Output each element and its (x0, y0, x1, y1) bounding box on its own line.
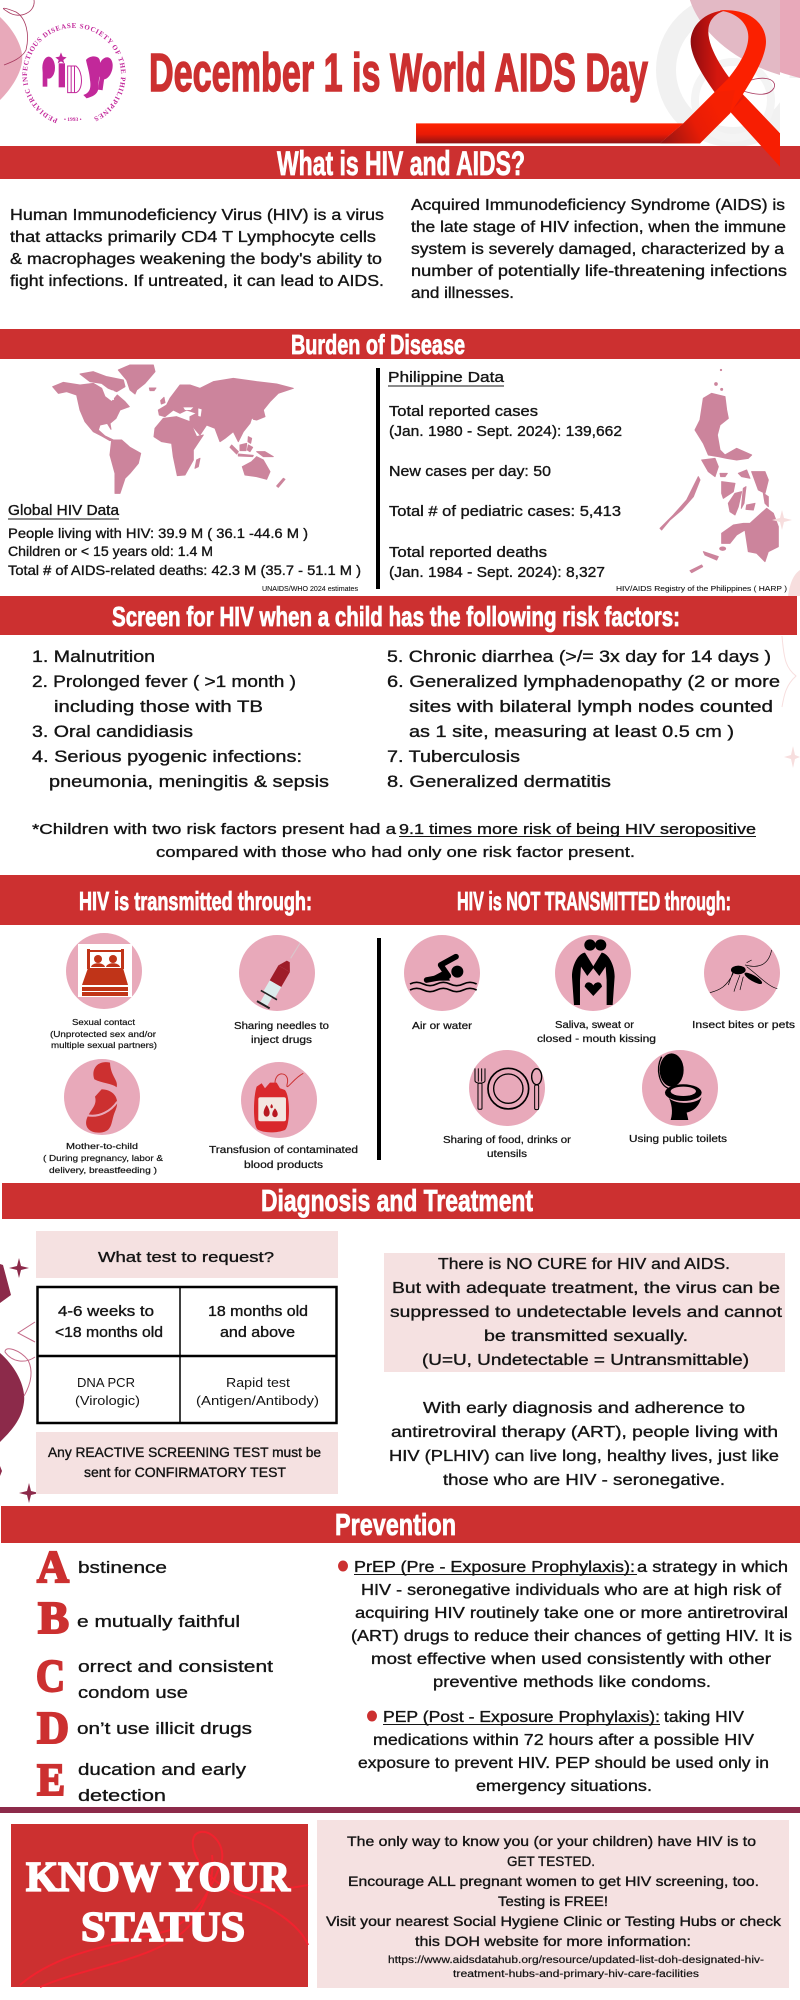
table: HIV tests by age: and above (220, 1325, 295, 1341)
banner: risk factors (0, 596, 797, 635)
panel: get tested information: https://www.aidsdatahub.org/resource/updated-list-doh-designated-hiv- (388, 1955, 764, 1966)
text block: PrEP (338, 1559, 792, 1691)
list: ABCDE of prevention: bstinence (78, 1558, 167, 1577)
list: risk factors 1 to 4: 3. Oral candidiasis (32, 723, 193, 741)
decorative sparkles and curves: right edge (772, 510, 800, 768)
banner: Burden of Disease: Burden of Disease (291, 329, 465, 360)
text block: PrEP: preventive methods like condoms. (433, 1674, 711, 1691)
text block: HIV definition: that attacks primarily CD4 T Lymphocyte cells (10, 229, 376, 246)
label: public toilets: Using public toilets (629, 1134, 727, 1145)
panel: get tested information: Visit your nearest Social Hygiene Clinic or Testing Hubs or check (326, 1913, 782, 1929)
icon: toilet (642, 1050, 718, 1126)
panel: global HIV data (8, 503, 361, 593)
list: ABCDE of prevention: detection (78, 1786, 166, 1805)
callout: no cure: be transmitted sexually. (484, 1328, 688, 1345)
callout: no cure: But with adequate treatment, the virus can be (392, 1280, 780, 1297)
text block: AIDS definition: Acquired Immunodeficiency Syndrome (AIDS) is (411, 197, 785, 214)
panel: get tested information: The only way to know you (or your children) have HIV is to (347, 1833, 756, 1849)
panel: get tested information: GET TESTED. (507, 1853, 595, 1869)
panel: know your status (11, 1824, 308, 1987)
label: sexual contact: Sexual contact (72, 1017, 136, 1027)
label: saliva: closed - mouth kissing (537, 1034, 656, 1045)
panel: what test to request (36, 1231, 338, 1278)
panel: get tested information: treatment-hubs-and-primary-hiv-care-facilities (453, 1969, 699, 1980)
label: mother to child (43, 1141, 163, 1175)
banner: Burden of Disease (0, 329, 800, 360)
list: risk factors 5 to 8: 7. Tuberculosis (387, 748, 520, 766)
panel: Philippine data: New cases per day: 50 (389, 463, 551, 480)
panel: know your status: KNOW YOUR (26, 1855, 291, 1901)
panel: Philippine data: Philippine Data (388, 369, 505, 386)
list: ABCDE of prevention: ducation and early (78, 1760, 247, 1779)
list: ABCDE of prevention: condom use (78, 1683, 188, 1702)
panel: Philippine data (388, 369, 788, 593)
label: sharing needles: Sharing needles to (234, 1021, 329, 1032)
icon: red ribbon (416, 10, 780, 167)
table: HIV tests by age (37, 1287, 337, 1423)
label: insect bites: Insect bites or pets (692, 1020, 795, 1031)
divider: transmission section (377, 938, 381, 1160)
list: ABCDE of prevention: e mutually faithful (77, 1612, 240, 1631)
icon: blood bag (241, 1062, 317, 1138)
panel: get tested information: Encourage ALL pregnant women to get HIV screening, too. (348, 1873, 759, 1889)
label: sexual contact: (Unprotected sex and/or (50, 1029, 156, 1039)
text block: HIV definition: & macrophages weakening the body's ability to (10, 251, 382, 268)
text block: early diagnosis (389, 1400, 779, 1489)
icon: syringe (239, 935, 315, 1011)
label: mother to child: ( During pregnancy, labor & (43, 1153, 163, 1163)
banner: transmission: HIV is transmitted through: (79, 886, 312, 916)
text block: PEP: taking HIV (664, 1709, 745, 1726)
banner: Prevention (1, 1506, 800, 1543)
list: risk factors 1 to 4 (32, 648, 329, 791)
text block: PEP: PEP (Post - Exposure Prophylaxis): (383, 1709, 660, 1726)
text block: early diagnosis: those who are HIV - seronegative. (443, 1472, 725, 1489)
text block: PEP: exposure to prevent HIV. PEP should be used only in (358, 1755, 769, 1772)
icon: couple (555, 935, 631, 1011)
banner: Diagnosis and Treatment: Diagnosis and Treatment (261, 1183, 533, 1218)
panel: what test to request: What test to request? (98, 1249, 274, 1266)
list: ABCDE of prevention: on’t use illicit drugs (77, 1719, 252, 1738)
panel: global HIV data: Global HIV Data (8, 503, 120, 519)
label: transfusion: Transfusion of contaminated (209, 1145, 358, 1156)
callout: confirmatory test (36, 1432, 338, 1494)
callout: no cure: suppressed to undetectable levels and cannot (390, 1304, 783, 1321)
panel: Philippine data: Total reported deaths (389, 544, 547, 561)
table: HIV tests by age: <18 months old (55, 1325, 163, 1341)
callout: no cure: (U=U, Undetectable = Untransmittable) (422, 1352, 749, 1369)
panel: get tested information: this DOH website for more information: (415, 1933, 691, 1949)
table: HIV tests by age: (Antigen/Antibody) (196, 1393, 319, 1408)
world map (53, 365, 293, 493)
label: sharing food (443, 1135, 572, 1160)
icon: plate and cutlery (469, 1050, 545, 1126)
text block: PEP: medications within 72 hours after a possible HIV (373, 1732, 755, 1749)
callout: no cure (384, 1253, 785, 1372)
icon: sexual contact (66, 933, 142, 1009)
callout: no cure: There is NO CURE for HIV and AIDS. (438, 1256, 730, 1273)
label: air or water: Air or water (412, 1021, 473, 1032)
list: ABCDE of prevention: orrect and consistent (78, 1657, 273, 1676)
panel: Philippine data: HIV/AIDS Registry of the Philippines ( HARP ) (616, 584, 788, 593)
callout: risk note: 9.1 times more risk of being HIV seropositive (399, 821, 756, 838)
label: sharing needles (234, 1021, 329, 1046)
list: risk factors 5 to 8: as 1 site, measuring at least 0.5 cm ) (409, 723, 734, 741)
text block: AIDS definition: number of potentially life-threatening infections (411, 263, 787, 280)
panel: Philippine data: Total reported cases (389, 403, 538, 420)
list: risk factors 1 to 4: 1. Malnutrition (32, 648, 155, 666)
banner: Prevention: Prevention (335, 1507, 456, 1542)
callout: confirmatory test: Any REACTIVE SCREENING TEST must be (48, 1445, 321, 1460)
list: risk factors 5 to 8: 8. Generalized dermatitis (387, 773, 611, 791)
text block: PEP: emergency situations. (476, 1778, 652, 1795)
banner: transmission (0, 875, 800, 925)
label: sexual contact: multiple sexual partners) (51, 1040, 157, 1050)
table: HIV tests by age: 4-6 weeks to (58, 1304, 154, 1320)
panel: know your status: STATUS (81, 1905, 245, 1951)
label: sexual contact (50, 1017, 157, 1050)
callout: risk note (32, 821, 756, 861)
list: ABCDE of prevention: B (38, 1592, 69, 1643)
text block: AIDS definition: the late stage of HIV infection, when the immune (411, 219, 786, 236)
list: risk factors 1 to 4: 4. Serious pyogenic infections: (32, 748, 302, 766)
text block: AIDS definition (411, 197, 787, 302)
list: risk factors 5 to 8 (387, 648, 780, 791)
table: HIV tests by age: (Virologic) (75, 1393, 140, 1408)
label: saliva: Saliva, sweat or (555, 1020, 635, 1031)
text block: HIV definition (10, 207, 384, 290)
list: ABCDE of prevention: C (36, 1650, 65, 1701)
table: HIV tests by age: DNA PCR (77, 1375, 135, 1390)
label: mother to child: Mother-to-child (66, 1141, 138, 1151)
text block: AIDS definition: and illnesses. (411, 285, 514, 302)
list: risk factors 1 to 4: 2. Prolonged fever ( >1 month ) (32, 673, 296, 691)
panel: Philippine data: (Jan. 1980 - Sept. 2024): 139,662 (389, 423, 622, 440)
panel: get tested information: Testing is FREE! (498, 1893, 608, 1909)
table: HIV tests by age: Rapid test (226, 1375, 290, 1390)
text block: HIV definition: Human Immunodeficiency Virus (HIV) is a virus (10, 207, 384, 224)
callout: risk note: compared with those who had only one risk factor present. (156, 844, 635, 861)
label: mother to child: delivery, breastfeeding ) (49, 1165, 157, 1175)
panel: global HIV data: UNAIDS/WHO 2024 estimates (262, 584, 358, 593)
divider: maroon bar (0, 1807, 800, 1813)
callout: confirmatory test: sent for CONFIRMATORY TEST (84, 1465, 286, 1480)
text block: PrEP: HIV - seronegative individuals who are at high risk of (361, 1582, 782, 1599)
list: risk factors 5 to 8: 5. Chronic diarrhea (>/= 3x day for 14 days ) (387, 648, 771, 666)
text block: early diagnosis: With early diagnosis and adherence to (423, 1400, 745, 1417)
list: ABCDE of prevention: D (37, 1702, 69, 1753)
icon: mosquito (704, 935, 780, 1011)
panel: global HIV data: Children or < 15 years old: 1.4 M (8, 543, 213, 559)
panel: get tested information (317, 1820, 789, 1988)
logo: Pediatric Infectious Disease Society of the Philippines: PEDIATRIC INFECTIOUS DISEASE SOCIETY OF THE PHILIPPINES (22, 23, 126, 124)
logo: Pediatric Infectious Disease Society of the Philippines: • 1993 • (64, 117, 82, 123)
banner: What is HIV and AIDS?: What is HIV and AIDS? (277, 145, 525, 183)
text block: PrEP: PrEP (Pre - Exposure Prophylaxis): (354, 1559, 635, 1576)
text block: PEP (358, 1709, 769, 1795)
icon: swimmer (404, 935, 480, 1011)
label: transfusion: blood products (244, 1160, 323, 1171)
label: saliva (537, 1020, 656, 1045)
text block: PrEP: a strategy in which (637, 1559, 788, 1576)
label: sharing needles: inject drugs (251, 1035, 312, 1046)
decorative background shapes: top right (666, 0, 800, 146)
table: HIV tests by age: 18 months old (208, 1304, 308, 1320)
icon: mother to child (64, 1059, 140, 1135)
text block: PrEP: (ART) drugs to reduce their chances of getting HIV. It is (351, 1628, 792, 1645)
text block: PrEP: acquiring HIV routinely take one or more antiretroviral (355, 1605, 788, 1622)
map: Philippines (660, 369, 778, 573)
panel: global HIV data: Total # of AIDS-related deaths: 42.3 M (35.7 - 51.1 M ) (8, 562, 361, 578)
list: ABCDE of prevention (36, 1541, 273, 1805)
decorative background shapes: top left (0, 0, 34, 100)
panel: Philippine data: (Jan. 1984 - Sept. 2024): 8,327 (389, 564, 605, 581)
list: ABCDE of prevention: E (37, 1754, 65, 1805)
label: sharing food: Sharing of food, drinks or (443, 1135, 572, 1146)
list: risk factors 1 to 4: including those with TB (54, 698, 263, 716)
banner: What is HIV and AIDS? (0, 145, 800, 183)
label: transfusion (209, 1145, 358, 1171)
banner: Diagnosis and Treatment (2, 1183, 800, 1219)
divider: burden section (376, 368, 380, 589)
decorative shapes: left edge (0, 1258, 39, 1503)
panel: Philippine data: Total # of pediatric cases: 5,413 (389, 503, 621, 520)
list: risk factors 1 to 4: pneumonia, meningitis & sepsis (49, 773, 329, 791)
list: ABCDE of prevention: A (37, 1541, 69, 1592)
text block: AIDS definition: system is severely damaged, characterized by a (411, 241, 784, 258)
list: risk factors 5 to 8: sites with bilateral lymph nodes counted (409, 698, 773, 716)
list: risk factors 5 to 8: 6. Generalized lymphadenopathy (2 or more (387, 673, 780, 691)
text block: HIV definition: fight infections. If untreated, it can lead to AIDS. (10, 273, 384, 290)
text block: early diagnosis: antiretroviral therapy (ART), people living with (391, 1424, 778, 1441)
panel: global HIV data: People living with HIV: 39.9 M ( 36.1 -44.6 M ) (8, 525, 308, 541)
text block: early diagnosis: HIV (PLHIV) can live long, healthy lives, just like (389, 1448, 779, 1465)
text block: PrEP: most effective when used consistently with other (371, 1651, 771, 1668)
callout: risk note: *Children with two risk factors present had a (32, 821, 397, 838)
label: sharing food: utensils (487, 1149, 527, 1160)
